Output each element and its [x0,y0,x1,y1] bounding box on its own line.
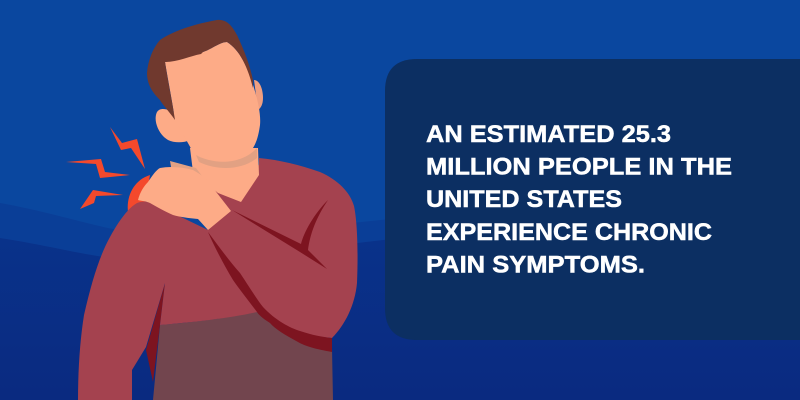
ear left [156,109,190,142]
panel: statistic card [385,59,800,340]
neck shadow [196,148,257,168]
neck [190,148,259,202]
shirt fold: under forearm [208,232,332,352]
statistic text: EXPERIENCE CHRONIC [426,219,712,246]
trousers [153,311,333,400]
statistic text: PAIN SYMPTOMS. [426,252,645,278]
icon: pain bolts [66,127,145,209]
hand on shoulder [138,167,231,230]
shirt fold: elbow [232,200,328,269]
illustration: man holding shoulder [66,20,358,400]
hair [147,20,253,120]
statistic text: AN ESTIMATED 25.3 [426,121,671,148]
ear right [254,80,263,110]
icon: inflamed shoulder [128,175,150,212]
statistic text: MILLION PEOPLE IN THE [426,154,732,180]
statistic text [426,121,732,278]
shirt shadow at waist [146,283,165,382]
face [165,42,260,161]
shirt [78,158,358,400]
collar behind hand [170,161,205,180]
statistic text: UNITED STATES [426,186,622,213]
